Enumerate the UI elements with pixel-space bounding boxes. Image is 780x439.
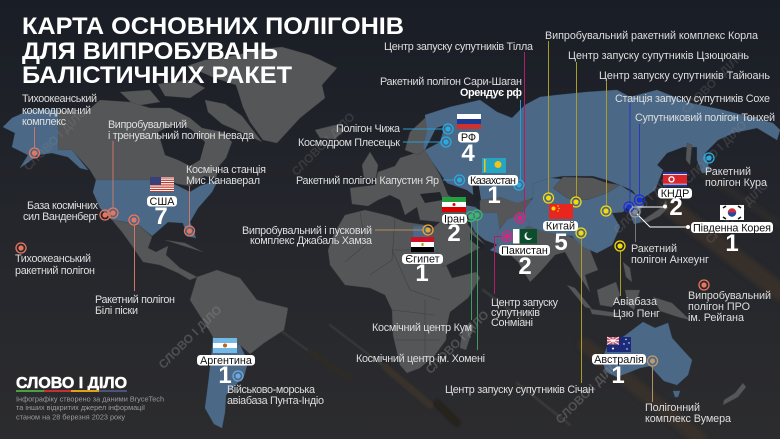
site labels: Супутниковий полігон Тонхей <box>635 112 775 124</box>
flag: Argentina <box>213 338 237 353</box>
site labels: Центр запуску супутників Цзюцюань <box>568 50 749 62</box>
flag: South Korea <box>720 205 744 220</box>
source credits: станом на 28 березня 2023 року <box>16 412 125 422</box>
site labels: Космічний центр Кум <box>372 322 472 334</box>
markers <box>16 124 714 381</box>
land: Pakistan <box>490 213 530 255</box>
site labels: супутників <box>491 307 540 319</box>
country counts: 1 <box>611 362 625 389</box>
Hudson Bay <box>158 122 205 166</box>
country label: Пакистан: Пакистан <box>501 245 548 257</box>
flag: North Korea <box>663 172 687 186</box>
site labels: Станція запуску супутників Сохе <box>615 93 770 105</box>
marker group: salmon USA and Pacific <box>16 148 709 290</box>
country label: КНДР: КНДР <box>661 188 689 200</box>
flag: Russia <box>457 114 481 129</box>
site labels: полігон Анхеунг <box>631 254 709 266</box>
land: Europe <box>350 150 485 267</box>
flag: Kazakhstan <box>482 158 506 173</box>
site labels: комплекс <box>22 116 67 128</box>
site labels: Центр запуску <box>491 297 559 309</box>
country label: США: США <box>150 196 175 208</box>
watermarks: СЛОВО І ДІЛО <box>681 118 750 187</box>
land: Madagascar <box>460 322 473 350</box>
flag: Iran <box>442 197 466 212</box>
site labels: ім. Рейгана <box>688 312 744 324</box>
land: South America <box>190 270 288 354</box>
markers: green sites <box>466 210 482 222</box>
land: Argentina <box>205 337 248 428</box>
site labels: Ракетний полігон <box>95 294 175 306</box>
title: ДЛЯ ВИПРОБУВАНЬ <box>22 38 278 65</box>
land: Egypt <box>413 226 440 250</box>
land: Alaska <box>3 110 88 170</box>
country counts: 1 <box>218 362 232 389</box>
marker: Egypt <box>423 225 433 235</box>
land: Greenland and Arctic <box>120 47 345 143</box>
country counts: 1 <box>725 230 739 257</box>
site labels: авіабаза Пунта-Індіо <box>227 395 324 407</box>
site labels: сил Ванденберг <box>23 211 98 223</box>
source credits: та інших відкритих джерел інформації <box>16 403 145 412</box>
source credits <box>16 394 164 422</box>
country counts: 4 <box>461 140 475 167</box>
site labels: Тихоокеанський <box>15 253 91 265</box>
markers: yellow sites <box>544 193 625 251</box>
site labels: Центр запуску супутників Січан <box>445 384 594 396</box>
inland seas <box>420 125 485 250</box>
flag: USA <box>150 177 174 192</box>
country label: Казахстан: Казахстан <box>470 175 516 187</box>
country label: Іран: Іран <box>444 214 465 226</box>
markers: magenta sites <box>502 213 525 242</box>
country counts: 5 <box>554 229 568 256</box>
site labels: Військово-морська <box>227 384 315 396</box>
country counts <box>154 140 739 389</box>
country counts: 7 <box>154 203 168 230</box>
site labels: База космічних <box>27 200 99 212</box>
site labels: Сонміані <box>491 317 533 329</box>
site labels: Авіабаза <box>613 296 657 308</box>
land: Koreas <box>628 198 644 224</box>
site labels: Полігонний <box>645 402 700 414</box>
watermarks: СЛОВО І ДІЛО <box>611 168 680 237</box>
site labels: Ракетний полігон Капустин Яр <box>296 175 439 187</box>
land: Southeast Asia and islands <box>567 143 746 405</box>
site labels: Космічна станція <box>186 164 266 176</box>
land: Scandinavia and Britain <box>362 112 450 178</box>
flag: China <box>549 204 573 219</box>
site labels: полігон ПРО <box>688 301 750 313</box>
site labels: Випробувальний і пусковий <box>242 225 372 237</box>
markers: North Korea <box>624 195 644 212</box>
land: Mongolia <box>553 177 620 200</box>
country counts: 2 <box>669 194 683 221</box>
country counts: 2 <box>518 253 532 280</box>
marker: Australia <box>648 356 658 366</box>
watermarks: СЛОВО І ДІЛО <box>679 48 748 117</box>
flag: Australia <box>607 337 631 352</box>
site labels: Цзю Пенг <box>613 308 660 320</box>
connector lines <box>34 41 688 402</box>
land: Central Asia and India <box>480 196 598 292</box>
connector end dots <box>663 204 690 229</box>
site labels: і тренувальний полігон Невада <box>108 130 254 142</box>
land: Africa <box>328 210 480 373</box>
site labels: полігон Кура <box>705 177 767 189</box>
site labels: Випробувальний ракетний комплекс Корла <box>545 30 758 42</box>
country counts: 1 <box>415 260 429 287</box>
country label: Китай: Китай <box>546 221 575 233</box>
site labels: Полігон Чижа <box>336 123 400 135</box>
country label: Єгипет: Єгипет <box>405 254 440 266</box>
site labels: Центр запуску супутників Тайюань <box>599 70 770 82</box>
marker: Argentina <box>233 371 243 381</box>
site labels: Космодром Плесецьк <box>298 137 400 149</box>
watermarks: СЛОВО І ДІЛО <box>289 110 358 179</box>
site labels: комплекс Вумера <box>645 413 731 425</box>
watermarks: СЛОВО І ДІЛО <box>553 358 622 427</box>
flag: Pakistan <box>513 229 537 244</box>
source credits: Інфографіку створено за даними BryceTech <box>16 394 164 404</box>
land: Australia <box>602 322 692 385</box>
land: Tasmania <box>673 391 680 397</box>
site labels: Ракетний <box>631 243 677 255</box>
site labels: Білі піски <box>95 305 138 317</box>
site labels: Тихоокеанський <box>22 93 97 105</box>
site labels: космодромний <box>22 105 91 117</box>
Africa borders <box>345 212 440 355</box>
site labels: Ракетний полігон Сари-Шаган <box>380 76 522 88</box>
site labels: ракетний полігон <box>15 265 95 277</box>
site labels: Космічний центр ім. Хомені <box>356 353 485 365</box>
logo: СЛОВО І ДІЛО <box>16 375 127 392</box>
site labels: Орендує рф <box>460 87 523 99</box>
flag: Egypt <box>411 237 434 252</box>
land: Mexico and Central America <box>112 220 203 280</box>
site labels: Випробувальний <box>108 119 187 131</box>
land: Canada <box>58 100 232 186</box>
site labels: Випробувальний <box>688 290 771 302</box>
site labels: Центр запуску супутників Тілла <box>384 41 533 53</box>
country label: Південна Корея: Південна Корея <box>693 222 771 234</box>
markers: cyan sites <box>441 124 714 190</box>
watermarks: СЛОВО І ДІЛО <box>703 178 772 247</box>
watermarks: СЛОВО І ДІЛО <box>156 303 225 372</box>
title <box>22 13 404 89</box>
site labels: Ракетний <box>705 166 751 178</box>
country counts: 2 <box>447 220 461 247</box>
watermarks: СЛОВО І ДІЛО <box>423 308 492 377</box>
marker: South Korea <box>630 207 640 217</box>
title: КАРТА ОСНОВНИХ ПОЛІГОНІВ <box>22 13 404 40</box>
country label: Аргентина: Аргентина <box>200 355 252 367</box>
country label: Австралія: Австралія <box>594 354 644 366</box>
site labels: Мис Канаверал <box>186 175 260 187</box>
title: БАЛІСТИЧНИХ РАКЕТ <box>22 62 292 89</box>
land: Russia and Kazakhstan <box>423 90 780 203</box>
country counts: 1 <box>487 182 501 209</box>
site labels: комплекс Джабаль Хамза <box>250 235 372 247</box>
country label: РФ: РФ <box>461 132 476 144</box>
land: USA <box>93 180 218 238</box>
land: China <box>522 178 640 253</box>
watermarks: СЛОВО І ДІЛО <box>21 105 90 174</box>
background rockets <box>280 170 780 439</box>
land: Iran <box>463 205 500 245</box>
